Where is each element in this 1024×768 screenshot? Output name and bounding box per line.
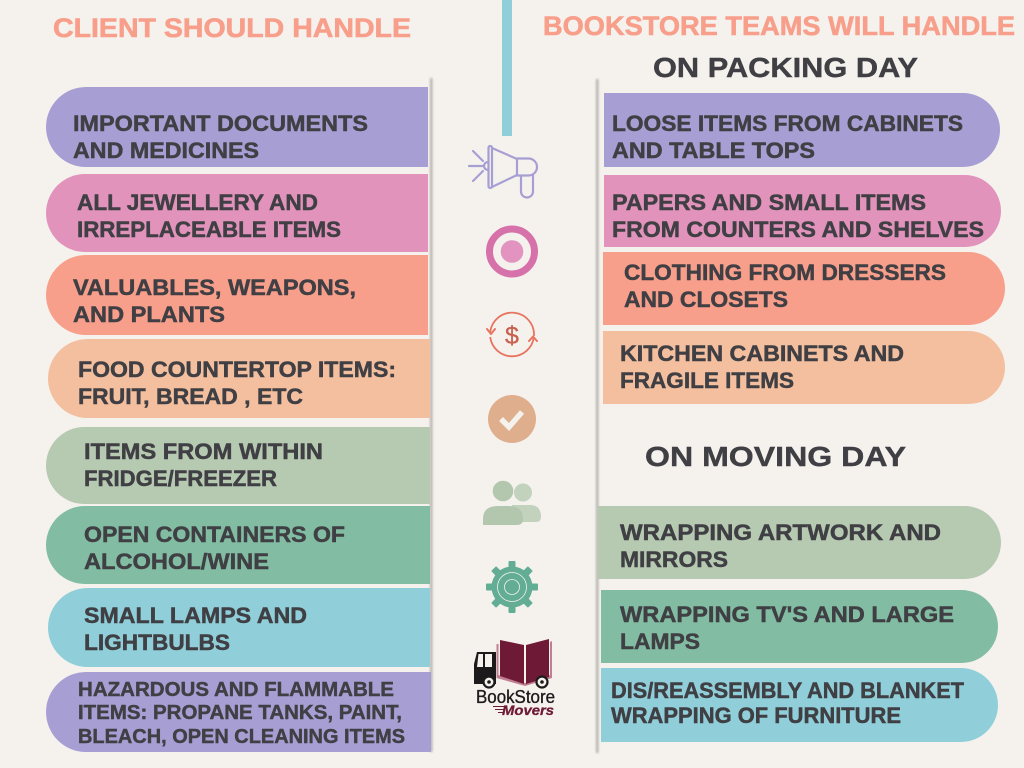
icon: megaphone: [469, 146, 537, 198]
panel: important documents: AND MEDICINES: [73, 138, 259, 163]
panel: lamps: [48, 588, 430, 667]
panel: kitchen: KITCHEN CABINETS AND: [620, 341, 904, 366]
panel: alcohol: [46, 506, 430, 584]
panel: food countertop: FOOD COUNTERTOP ITEMS:: [78, 357, 396, 382]
panel: jewellery: ALL JEWELLERY AND: [77, 190, 318, 215]
panel: clothing: AND CLOSETS: [624, 287, 788, 312]
panel: artwork: [598, 506, 1001, 579]
panel: food countertop: [48, 339, 430, 418]
panel: hazardous: ITEMS: PROPANE TANKS, PAINT,: [78, 702, 402, 724]
panel: fridge items: ITEMS FROM WITHIN: [84, 439, 323, 464]
right column shadow: [596, 79, 598, 753]
icon: dollar cycle: [487, 313, 537, 356]
panel: fridge items: [46, 427, 430, 504]
panel: jewellery: IRREPLACEABLE ITEMS: [77, 217, 341, 242]
logo: BookStore Movers: Movers: [502, 702, 554, 718]
panel: furniture: WRAPPING OF FURNITURE: [611, 703, 901, 728]
icon: dollar cycle: $: [505, 322, 519, 350]
panel: tvs: WRAPPING TV'S AND LARGE: [620, 602, 954, 627]
icon: people: [483, 481, 541, 525]
panel: important documents: [46, 87, 428, 167]
left column shadow: [430, 78, 432, 752]
icon: target: [490, 229, 534, 274]
panel: food countertop: FRUIT, BREAD , ETC: [78, 384, 303, 409]
panel: hazardous: [46, 672, 431, 752]
heading: on moving day: ON MOVING DAY: [645, 441, 906, 472]
panel: kitchen: [603, 331, 1005, 404]
panel: hazardous: HAZARDOUS AND FLAMMABLE: [78, 679, 394, 701]
panel: fridge items: FRIDGE/FREEZER: [84, 466, 277, 491]
panel: valuables: VALUABLES, WEAPONS,: [73, 275, 356, 300]
panel: furniture: [601, 668, 998, 742]
panel: tvs: LAMPS: [620, 629, 700, 654]
panel: loose items: [604, 93, 1000, 167]
center teal bar: [502, 0, 512, 136]
heading: bookstore teams will handle: BOOKSTORE TEAMS WILL HANDLE: [543, 11, 1015, 41]
panel: alcohol: OPEN CONTAINERS OF: [84, 522, 345, 547]
panel: lamps: LIGHTBULBS: [84, 630, 230, 655]
panel: alcohol: ALCOHOL/WINE: [84, 549, 269, 574]
panel: furniture: DIS/REASSEMBLY AND BLANKET: [611, 678, 964, 703]
icon: gear: [486, 561, 538, 613]
panel: kitchen: FRAGILE ITEMS: [620, 368, 794, 393]
panel: loose items: AND TABLE TOPS: [612, 138, 815, 163]
heading: client should handle: CLIENT SHOULD HANDLE: [53, 13, 411, 43]
panel: lamps: SMALL LAMPS AND: [84, 603, 307, 628]
panel: papers: [604, 175, 1001, 247]
panel: important documents: IMPORTANT DOCUMENTS: [73, 111, 368, 136]
heading: on packing day: ON PACKING DAY: [653, 52, 918, 83]
panel: papers: FROM COUNTERS AND SHELVES: [612, 217, 984, 242]
panel: hazardous: BLEACH, OPEN CLEANING ITEMS: [78, 726, 405, 748]
panel: artwork: MIRRORS: [620, 547, 728, 572]
panel: loose items: LOOSE ITEMS FROM CABINETS: [612, 111, 963, 136]
panel: valuables: AND PLANTS: [73, 302, 225, 327]
panel: valuables: [46, 255, 428, 335]
logo: BookStore Movers: [474, 639, 555, 718]
icon: check badge: [488, 395, 536, 443]
logo: BookStore Movers: BookStore: [476, 686, 555, 707]
panel: clothing: CLOTHING FROM DRESSERS: [624, 260, 946, 285]
panel: artwork: WRAPPING ARTWORK AND: [620, 520, 941, 545]
panel: jewellery: [46, 174, 428, 252]
panel: papers: PAPERS AND SMALL ITEMS: [612, 190, 926, 215]
panel: tvs: [601, 590, 998, 663]
panel: clothing: [603, 252, 1005, 325]
